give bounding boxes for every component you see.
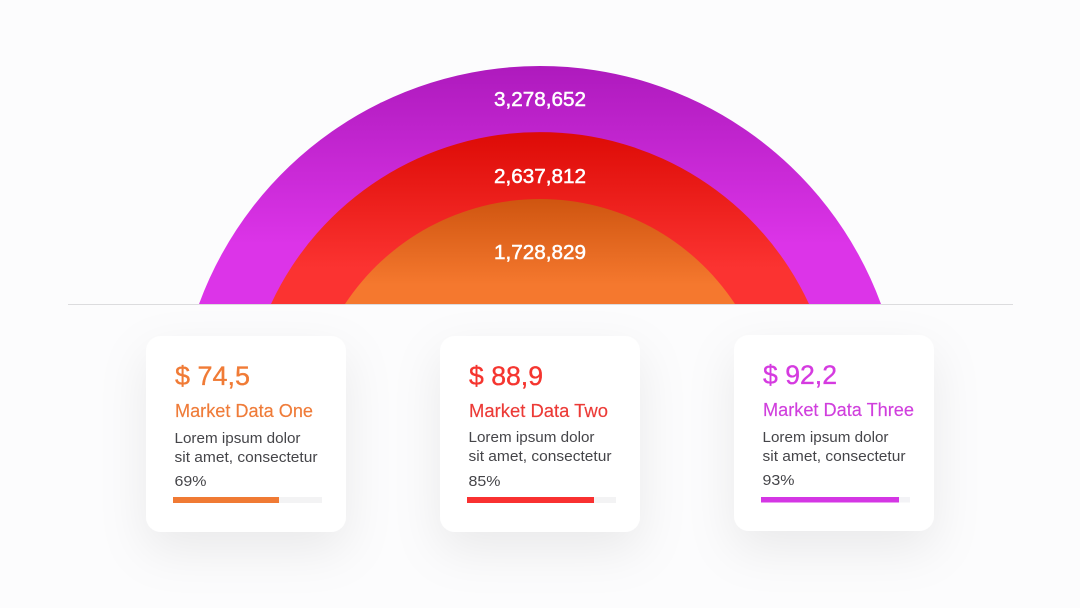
percent two: 85% [468,474,501,490]
value: inner band: 1,728,829 [494,242,586,264]
heading three: Market Data Three [763,400,914,420]
arc: inner orange band [345,199,735,304]
panel: market data three [734,335,934,531]
semicircle chart [199,66,881,304]
arc: outer purple band [199,66,881,304]
price two: $ 88,9 [469,361,543,391]
heading one: Market Data One [175,401,313,421]
percent three: 93% [762,473,795,489]
description two: Lorem ipsum dolor [468,430,595,446]
baseline [68,304,1013,305]
description three: Lorem ipsum dolor [762,430,889,446]
percent one: 69% [174,474,207,490]
progress bar two [467,497,616,503]
description two: sit amet, consectetur [468,449,612,465]
value: outer band: 3,278,652 [494,89,586,111]
arc: middle red band [271,132,809,304]
value: middle band: 2,637,812 [494,166,586,188]
description one: Lorem ipsum dolor [174,431,301,447]
progress bar one [173,497,322,503]
panel: market data two [440,336,640,532]
progress bar three [761,497,910,502]
heading two: Market Data Two [469,401,608,421]
panel: market data one [146,336,346,532]
description one: sit amet, consectetur [174,450,318,466]
price three: $ 92,2 [763,360,837,390]
description three: sit amet, consectetur [762,449,906,465]
price one: $ 74,5 [175,361,250,391]
